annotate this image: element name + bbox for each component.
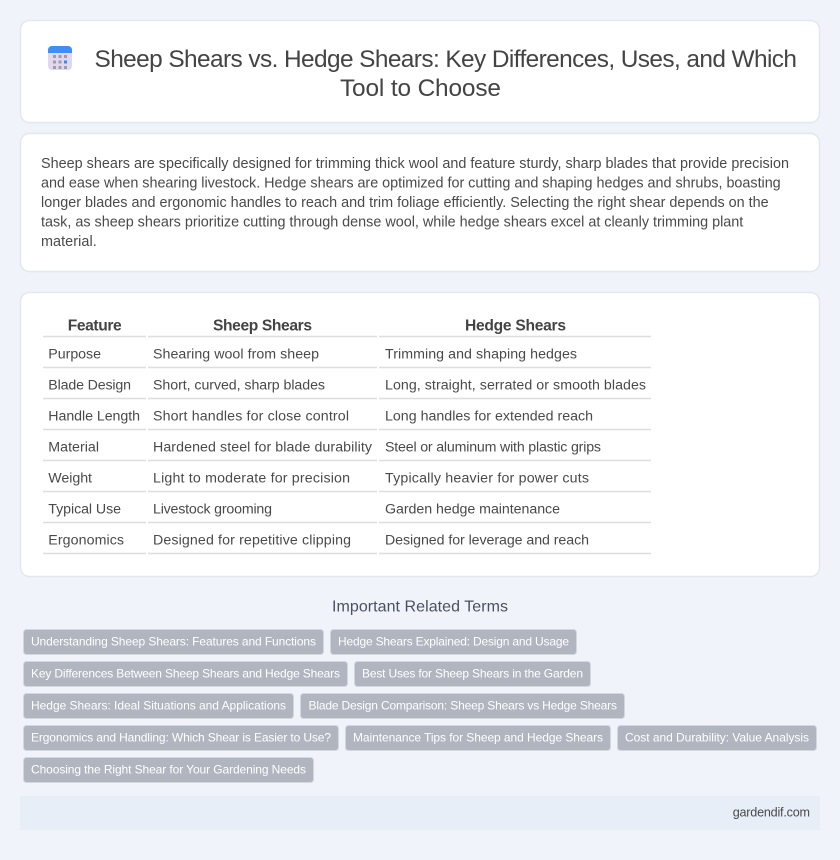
row: weight: Typically heavier for power cuts	[385, 470, 589, 486]
row: weight: Weight	[48, 470, 92, 486]
summary paragraph: and ease when shearing livestock. Hedge shears are optimized for cutting and shaping hedges and shrubs, boasting	[41, 176, 781, 192]
row: blade design: Long, straight, serrated or smooth blades	[385, 377, 646, 393]
title: Sheep Shears vs. Hedge Shears: Key Differences, Uses, and Which	[94, 46, 797, 73]
row: material: Hardened steel for blade durability	[153, 439, 373, 455]
summary paragraph: material.	[41, 234, 97, 250]
table header	[68, 318, 566, 335]
chip	[300, 694, 624, 718]
chip: Choosing the Right Shear for Your Gardening Needs	[31, 763, 306, 777]
table header: Hedge Shears	[465, 318, 566, 335]
row: ergonomics: Designed for repetitive clipping	[153, 532, 351, 548]
row: typical use: Livestock grooming	[153, 501, 272, 517]
chip: Cost and Durability: Value Analysis	[625, 731, 809, 745]
chip	[24, 694, 294, 718]
heading: important related terms: Important Related Terms	[332, 598, 508, 616]
chip: Best Uses for Sheep Shears in the Garden	[362, 667, 583, 681]
summary paragraph: longer blades and ergonomic handles to reach and trim foliage efficiently. Selecting the right shear depends on the	[41, 195, 769, 211]
row: handle length: Short handles for close control	[153, 408, 349, 424]
chip: Understanding Sheep Shears: Features and Functions	[31, 635, 316, 649]
chip: Ergonomics and Handling: Which Shear is Easier to Use?	[31, 731, 331, 745]
chip	[346, 726, 610, 750]
chip	[24, 662, 348, 686]
row: material: Material	[48, 439, 99, 455]
chip: Hedge Shears: Ideal Situations and Applications	[31, 699, 286, 713]
row: purpose	[48, 346, 577, 362]
panel: summary text	[20, 134, 820, 272]
row: purpose: Purpose	[48, 346, 101, 362]
row: handle length: Long handles for extended reach	[385, 408, 593, 424]
summary paragraph	[41, 156, 789, 250]
chip: Blade Design Comparison: Sheep Shears vs Hedge Shears	[308, 699, 617, 713]
summary paragraph: task, as sheep shears prioritize cutting through dense wool, while hedge shears excel at cleanly trimming plant	[41, 214, 743, 230]
row: purpose: Trimming and shaping hedges	[385, 346, 577, 362]
chip	[24, 630, 324, 654]
chip	[24, 758, 314, 782]
table header: Feature	[68, 318, 122, 335]
chip	[24, 726, 338, 750]
table header: Sheep Shears	[213, 318, 312, 335]
row: blade design: Blade Design	[48, 377, 131, 393]
row: handle length	[48, 408, 593, 424]
row: ergonomics: Designed for leverage and reach	[385, 532, 589, 548]
footer site name: gardendif.com	[733, 806, 810, 820]
row: material	[48, 439, 601, 455]
footer bar	[20, 796, 820, 830]
chip	[330, 630, 576, 654]
row: ergonomics	[48, 532, 589, 548]
row: handle length: Handle Length	[48, 408, 140, 424]
title: Tool to Choose	[340, 75, 501, 102]
row: typical use	[48, 501, 560, 517]
row: weight	[48, 470, 589, 486]
panel: comparison table	[20, 292, 820, 576]
icon: calendar	[48, 46, 72, 70]
chip: Key Differences Between Sheep Shears and Hedge Shears	[31, 667, 340, 681]
chip: Hedge Shears Explained: Design and Usage	[338, 635, 569, 649]
row: blade design	[48, 377, 646, 393]
panel: related term chips	[24, 630, 816, 782]
chip: Maintenance Tips for Sheep and Hedge Shears	[353, 731, 603, 745]
row: typical use: Garden hedge maintenance	[385, 501, 560, 517]
row: blade design: Short, curved, sharp blades	[153, 377, 325, 393]
row: weight: Light to moderate for precision	[153, 470, 350, 486]
panel: title card	[20, 20, 820, 122]
chip	[618, 726, 816, 750]
row: typical use: Typical Use	[48, 501, 121, 517]
summary paragraph: Sheep shears are specifically designed for trimming thick wool and feature sturdy, sharp blades that provide precision	[41, 156, 789, 172]
chip	[354, 662, 590, 686]
row: purpose: Shearing wool from sheep	[153, 346, 319, 362]
row: ergonomics: Ergonomics	[48, 532, 124, 548]
title	[94, 46, 797, 102]
row: material: Steel or aluminum with plastic grips	[385, 439, 601, 455]
